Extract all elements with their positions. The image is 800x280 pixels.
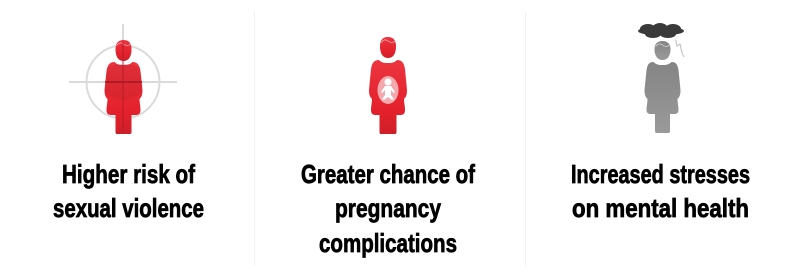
icon: lightning bolt bbox=[676, 40, 684, 57]
panel: sexual violence bbox=[53, 24, 204, 223]
icon: woman in crosshair bbox=[69, 24, 177, 134]
icon: storm cloud bbox=[638, 23, 684, 38]
heading: increased stresses on mental health bbox=[571, 159, 750, 223]
icon: pregnant woman bbox=[369, 37, 407, 134]
heading: higher risk of sexual violence bbox=[53, 159, 204, 223]
heading: greater chance of pregnancy complications: pregnancy bbox=[335, 193, 441, 223]
panel: pregnancy complications bbox=[301, 37, 475, 258]
heading: increased stresses on mental health: on mental health bbox=[572, 193, 749, 223]
panel: mental health bbox=[571, 23, 750, 223]
heading: greater chance of pregnancy complications: Greater chance of bbox=[301, 159, 475, 189]
heading: greater chance of pregnancy complications: complications bbox=[319, 228, 457, 258]
heading: higher risk of sexual violence: Higher risk of bbox=[62, 159, 195, 189]
heading: greater chance of pregnancy complications bbox=[301, 159, 475, 258]
icon: woman under storm cloud bbox=[638, 23, 684, 133]
icon: baby in womb bbox=[378, 76, 398, 104]
heading: higher risk of sexual violence: sexual violence bbox=[53, 193, 204, 223]
heading: increased stresses on mental health: Increased stresses bbox=[571, 159, 750, 189]
